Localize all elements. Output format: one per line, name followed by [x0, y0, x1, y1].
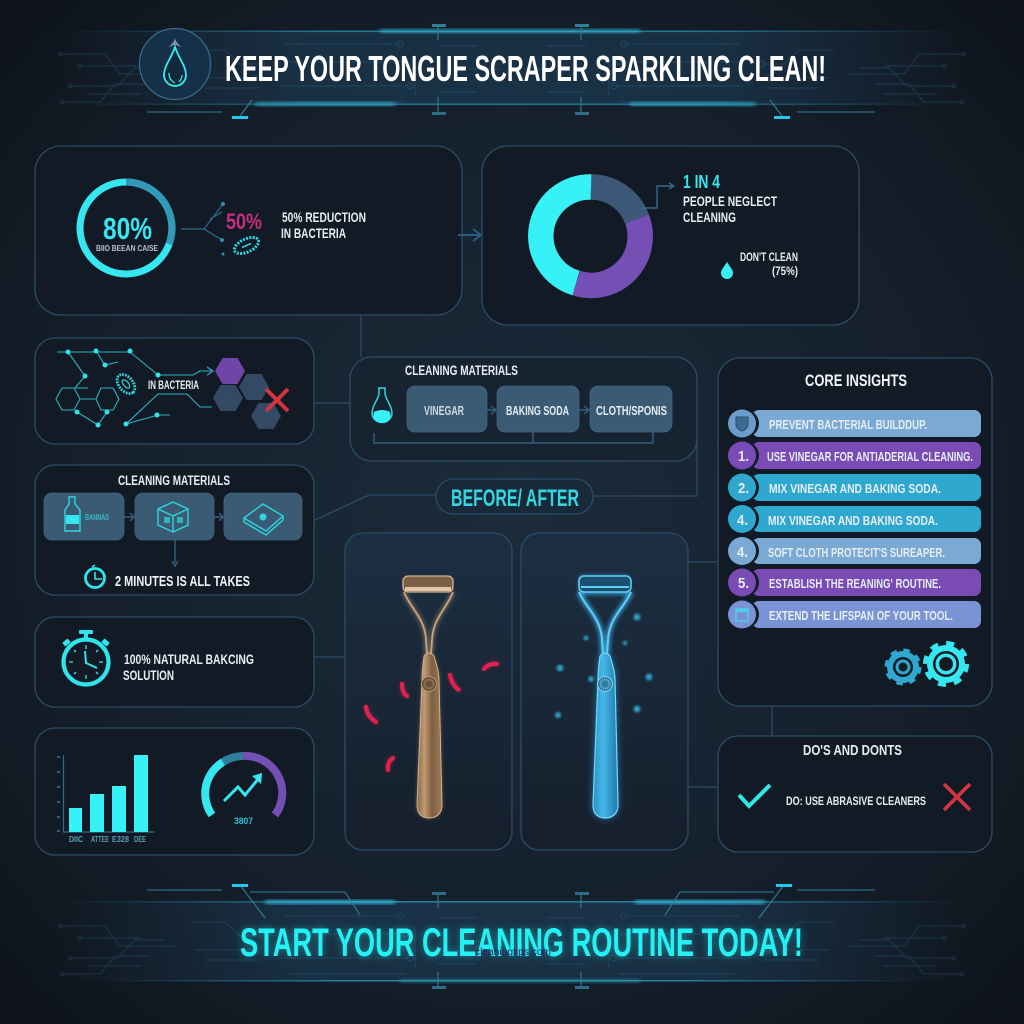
heading: CLEANING MATERIALS	[405, 363, 518, 378]
scraper: before	[403, 576, 453, 818]
ring chart: 80%: BIIO BEEAN CAISE	[96, 243, 158, 253]
text: 50% reduction: 50% REDUCTION	[282, 209, 366, 225]
panel: cleaning materials (icons)	[35, 465, 314, 595]
gauge	[205, 756, 282, 826]
box: baking soda	[497, 386, 579, 432]
box: vinegar	[407, 386, 487, 432]
text: 50% reduction	[281, 209, 366, 241]
box: cloth/sponge	[590, 386, 672, 432]
card: cloth	[224, 493, 302, 540]
stat: 1 in 4	[683, 172, 777, 225]
panel: before	[345, 533, 512, 850]
icon: cross	[944, 784, 970, 810]
icon: bacterium	[114, 371, 138, 397]
pill: before / after	[436, 479, 593, 514]
panel: neglect donut	[482, 146, 859, 325]
panel: core insights	[718, 358, 992, 706]
bar chart: E328	[112, 835, 129, 844]
legend: don't clean	[740, 250, 798, 278]
ring chart: 80%: 80%	[103, 211, 152, 246]
row 2: 1.	[738, 448, 749, 465]
hexagon cluster	[213, 358, 281, 429]
stat: 50%: 50%	[226, 209, 262, 234]
row 3: MIX VINEGAR AND BAKING SODA.	[769, 481, 941, 496]
branching lines	[181, 202, 225, 256]
row 1: PREVENT BACTERIAL BUILDDUP.	[769, 417, 927, 432]
icon: red cross	[266, 389, 288, 411]
row 5	[728, 537, 981, 565]
donut chart	[541, 187, 640, 285]
box: baking soda: BAKING SODA	[506, 404, 569, 418]
heading: CORE INSIGHTS	[805, 371, 907, 390]
card: bottle: BANNAS	[85, 513, 109, 522]
flow arrows	[124, 513, 223, 566]
row 6	[728, 568, 981, 596]
row 7: EXTEND THE LIFSPAN OF YOUR TOOL.	[769, 608, 953, 623]
icon: stopwatch	[62, 630, 110, 684]
bar chart: DEE	[134, 835, 146, 844]
row 2	[728, 442, 981, 470]
panel: bacteria network	[35, 338, 314, 444]
card: cube	[135, 493, 214, 540]
header banner	[58, 24, 966, 119]
legend: don't clean: (75%)	[772, 264, 798, 278]
panel: cleaning materials (flow)	[350, 357, 697, 461]
legend: don't clean: DON'T CLEAN	[740, 250, 798, 264]
row 1	[728, 410, 981, 438]
flow arrows and bracket	[374, 406, 653, 443]
text: natural solution: SOLUTION	[123, 667, 174, 683]
icon: check	[739, 785, 770, 806]
row 4: MIX VINEGAR AND BAKING SODA.	[768, 513, 938, 528]
box: vinegar: VINEGAR	[424, 404, 464, 418]
footer banner	[58, 884, 966, 989]
card: bottle	[44, 493, 124, 540]
text: natural solution	[123, 651, 254, 683]
panel: do's and don'ts	[718, 736, 992, 852]
text: natural solution: 100% NATURAL BAKCING	[124, 651, 254, 667]
heading: DO'S AND DONTS	[803, 742, 902, 759]
row 7	[728, 600, 981, 628]
icon: clock	[86, 565, 104, 588]
row 6: ESTABLISH THE REANING' ROUTINE.	[769, 576, 941, 591]
row 4: 4.	[737, 512, 748, 529]
network diagram	[56, 348, 213, 428]
callout line	[640, 183, 674, 208]
text: 50% reduction: IN BACTERIA	[281, 225, 346, 241]
text: use abrasive cleaners: DO: USE ABRASIVE CLEANERS	[786, 794, 926, 808]
icon: bacterium	[232, 234, 261, 257]
panel: natural solution	[35, 617, 314, 707]
stat: 1 in 4: PEOPLE NEGLECT	[683, 193, 777, 209]
bar chart	[57, 755, 155, 844]
box: cloth/sponge: CLOTH/SPONIS	[596, 404, 667, 418]
bacteria cluster	[366, 664, 497, 770]
stat: 1 in 4: CLEANING	[683, 209, 736, 225]
heading: CLEANING MATERIALS	[118, 473, 230, 488]
label: in bacteria: IN BACTERIA	[148, 378, 199, 392]
icon: flask	[372, 388, 392, 423]
stat: 1 in 4: 1 IN 4	[683, 172, 720, 192]
ring chart: 80%	[80, 182, 172, 274]
pill: before / after: BEFORE/ AFTER	[451, 485, 579, 512]
bar chart: DIIC	[69, 835, 83, 844]
row 4	[728, 505, 981, 533]
bar chart: ATTEE	[91, 835, 109, 844]
row 3	[728, 474, 981, 502]
icon: large gear	[926, 644, 966, 684]
gauge: 3807	[234, 816, 253, 826]
row 6: 5.	[738, 575, 749, 592]
scraper: after	[579, 576, 631, 818]
row 5: 4.	[737, 544, 748, 561]
panel: charts	[35, 728, 314, 855]
connector lines	[314, 315, 772, 787]
icon: small gear	[886, 650, 920, 684]
arrow between top panels	[458, 229, 481, 241]
panel: bacteria reduction stats	[35, 146, 462, 315]
clean sparkles	[555, 614, 652, 718]
row 5: SOFT CLOTH PROTECIT'S SUREAPER.	[768, 545, 945, 560]
text: 2 minutes: 2 MINUTES IS ALL TAKES	[115, 573, 250, 590]
small overprint url: cleaningtips.com	[475, 947, 551, 958]
icon: droplet	[721, 262, 733, 279]
row 3: 2.	[738, 480, 749, 497]
panel: after	[521, 533, 688, 850]
icon: water drop badge	[140, 28, 210, 100]
